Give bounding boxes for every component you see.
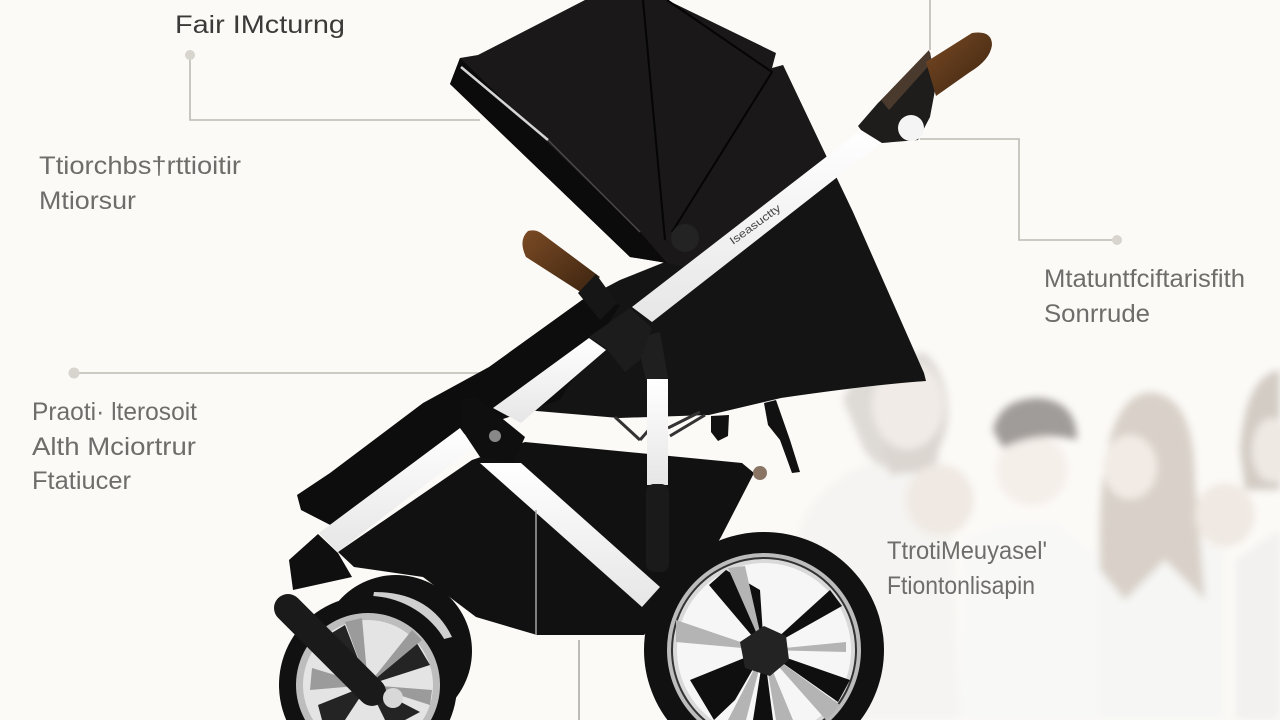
person: woman bbox=[1096, 389, 1256, 602]
person: boy bbox=[993, 398, 1077, 506]
callout line: left bbox=[68, 368, 480, 378]
callout line: top right bbox=[929, 0, 931, 50]
rear wheel bbox=[644, 532, 884, 720]
seat cushion and footrest bbox=[297, 300, 620, 530]
text: left lower label: Alth Mciortrur bbox=[32, 433, 196, 461]
front fork bbox=[288, 608, 372, 692]
front wheel bbox=[279, 596, 457, 720]
photo: faded family bbox=[795, 353, 1280, 720]
basket bbox=[338, 442, 754, 635]
mechanism struts bbox=[615, 412, 705, 440]
text: top label: Fair IMcturng bbox=[175, 11, 345, 39]
text: right label bbox=[1044, 265, 1245, 328]
text: left upper label: Ttiorchbs†rttioitir bbox=[39, 152, 241, 180]
person: man bbox=[842, 351, 950, 480]
axle cap bbox=[383, 688, 403, 708]
text: left lower label: Praoti· lterosoit bbox=[32, 398, 197, 426]
vertical white tube bbox=[636, 332, 669, 572]
frame label: Iseasuctty bbox=[728, 202, 784, 247]
lower white bar bbox=[480, 463, 660, 607]
text: left upper label: Mtiorsur bbox=[39, 187, 136, 215]
armrest bbox=[522, 230, 617, 320]
text: right label: Mtatuntfciftarisfith bbox=[1044, 265, 1245, 293]
text: bottom right label: TtrotiMeuyasel' bbox=[887, 537, 1047, 565]
basket knob bbox=[753, 466, 767, 480]
main frame tube lower section bbox=[319, 428, 474, 552]
text: left lower label: Ftatiucer bbox=[32, 467, 131, 495]
main frame tube upper section bbox=[493, 338, 606, 423]
frame joint bbox=[589, 308, 652, 372]
rear leg bbox=[289, 534, 352, 590]
stroller bbox=[279, 0, 992, 720]
canopy bbox=[450, 0, 835, 270]
text: left lower label bbox=[32, 398, 197, 495]
handle bbox=[858, 32, 992, 143]
callout line: right bbox=[920, 139, 1122, 245]
person: small child bbox=[907, 464, 974, 535]
text: bottom right label: Ftiontonlisapin bbox=[887, 572, 1035, 600]
hinge joint bbox=[460, 397, 525, 463]
callout lines: bottom bbox=[536, 510, 579, 720]
text: left upper label bbox=[39, 152, 241, 215]
straps bbox=[711, 400, 800, 473]
callout line: top left bbox=[185, 50, 480, 120]
text: bottom right label bbox=[887, 537, 1047, 600]
seat body bbox=[515, 65, 926, 418]
rear wheel back bbox=[320, 575, 472, 720]
text: right label: Sonrrude bbox=[1044, 300, 1150, 328]
main frame tube top section bbox=[632, 130, 881, 322]
person: right bbox=[1235, 370, 1280, 720]
